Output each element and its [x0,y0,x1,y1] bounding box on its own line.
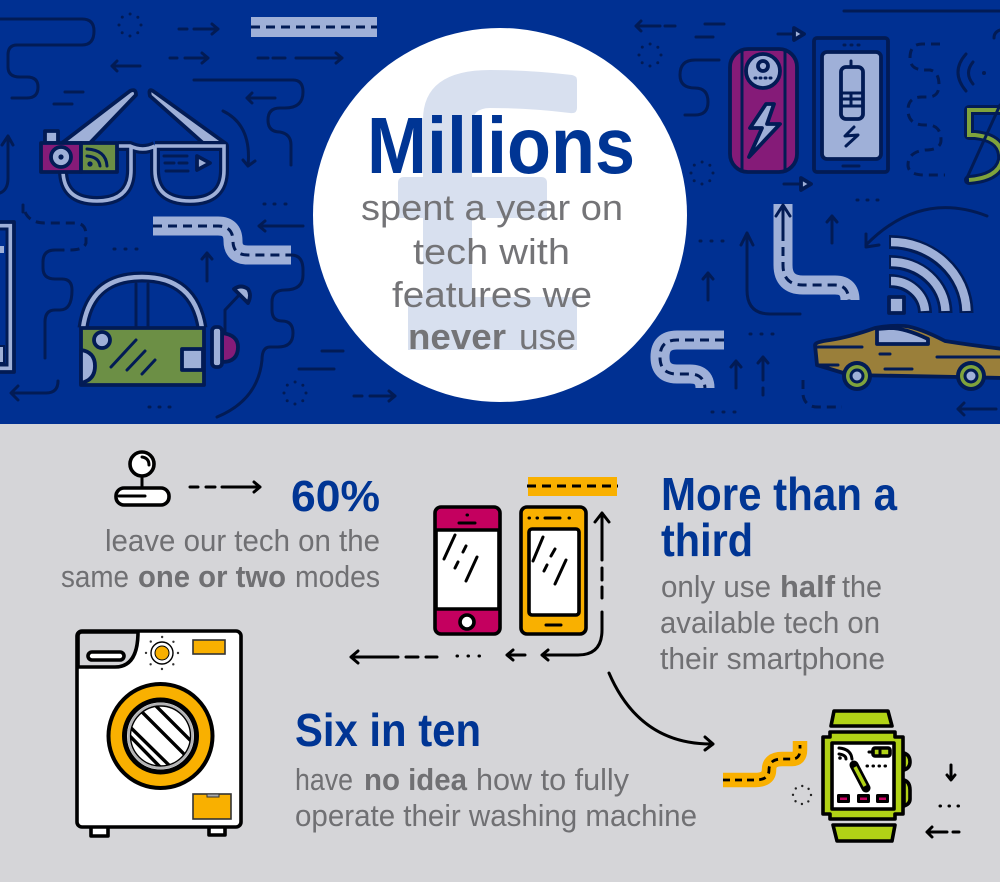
text block: washing machine description [295,762,697,833]
decorative lines: top left [0,14,342,212]
text block: headline subtitle [361,187,623,357]
icon: pound sign watermark [398,70,577,350]
arrow: phones looping path [351,513,609,663]
icon: 5G signal [958,30,1000,180]
icon: orange smartphone [521,507,586,634]
text block: headline subtitle: tech with [413,231,570,272]
text block: 60% description: same [61,559,129,594]
text block: smartphone description: available tech on [660,605,880,640]
road: orange winding [723,741,800,780]
decorative lines: lower right [700,208,996,415]
heading: 60%: 60% [291,472,380,521]
heading: More than a third [661,468,897,566]
heading: More than a third: More than a [661,468,897,520]
text block: smartphone description: the [842,569,882,604]
icon: power bank [730,49,797,172]
heading: Six in ten: Six in ten [295,704,481,756]
title: Millions: Millions [367,101,635,190]
icon: wifi symbol [889,242,966,313]
icon: smart glasses [41,90,225,201]
arrow: curved to smartwatch [609,673,713,750]
text block: washing machine description: no idea [364,762,468,797]
arrow: joystick to 60% [190,482,260,492]
road: orange straight [527,477,618,496]
text block: smartphone description: half [780,569,836,604]
road: S-shaped right [660,340,724,388]
heading: More than a third: third [661,514,753,566]
text block: smartphone description [660,569,885,676]
decorative lines: lower left [11,212,395,417]
panel: grey lower section [0,424,1000,882]
text block: 60% description: leave our tech on the [105,523,380,558]
icon: phone with battery [814,38,888,172]
icon: magenta smartphone [435,507,500,634]
decorative lines: top right [636,11,1000,200]
text block: 60% description [61,523,380,594]
text block: 60% description: one or two [138,559,286,594]
text block: smartphone description: their smartphone [660,641,885,676]
dotted circle [793,786,811,804]
text block: headline subtitle: features we [392,274,592,315]
text block: headline subtitle: never [408,316,506,357]
panel: blue header [0,0,1000,424]
text block: headline subtitle: use [519,316,576,357]
text block: washing machine description: have [295,762,353,797]
icon: washing machine [77,631,241,836]
decorative arrows: lower right [927,765,959,837]
text block: smartphone description: only use [661,569,771,604]
text block: washing machine description: operate their washing machine [295,798,697,833]
white circle [313,28,687,402]
text block: 60% description: modes [295,559,380,594]
icon: smart windscreen [81,277,250,385]
icon: connected car [815,326,1000,391]
road: L-shaped right [776,204,850,300]
icon: tablet edge [0,222,14,372]
text block: headline subtitle: spent a year on [361,187,623,228]
road: top centre [251,17,377,37]
text block: washing machine description: how to fully [476,762,629,797]
road: winding left [153,226,291,255]
icon: joystick [116,452,169,505]
icon: smartwatch [823,711,910,841]
